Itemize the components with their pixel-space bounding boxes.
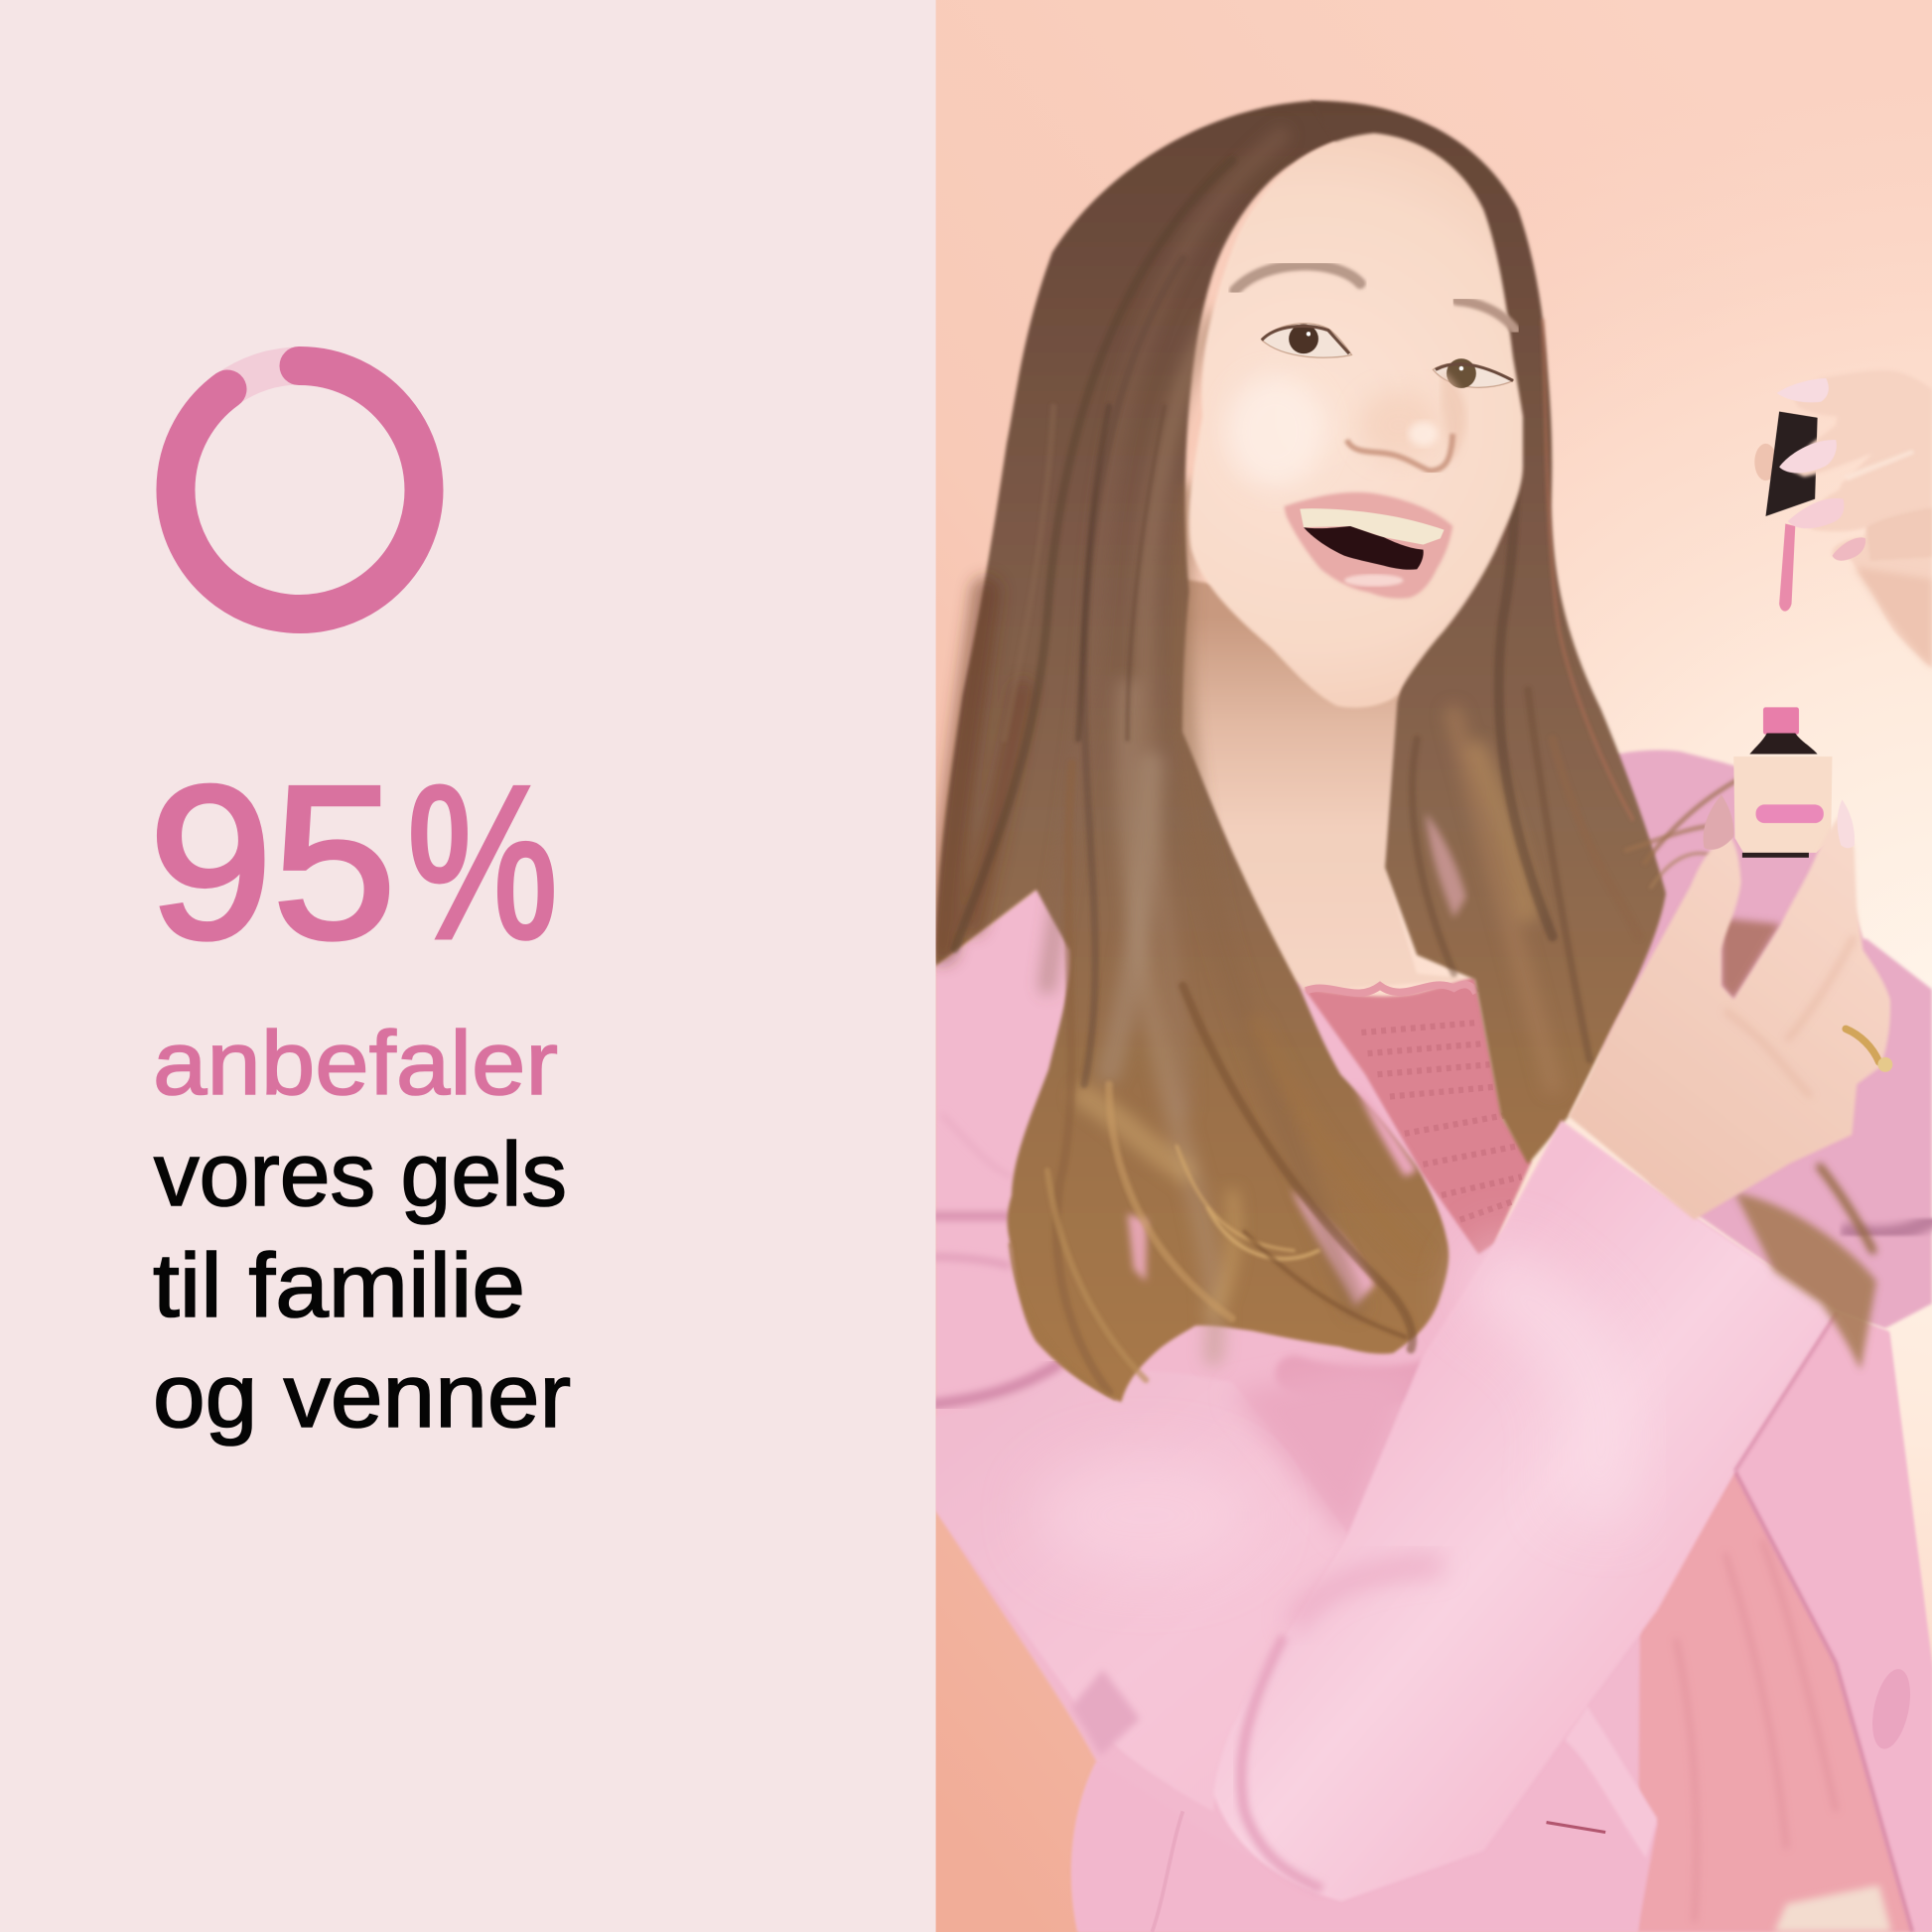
jacket: collar showing through hair: [1426, 813, 1466, 918]
donut value arc: [176, 365, 424, 614]
panel: photo of smiling woman holding nail gel bottle: [930, 0, 1932, 1932]
line: til familie: til familie: [153, 1236, 525, 1336]
jacket: far shoulder and raised sleeve: [1589, 750, 1932, 1328]
hair: front right section: [1310, 101, 1666, 1165]
blouse: smocked top: [1304, 977, 1532, 1254]
line: og venner: og venner: [153, 1346, 571, 1447]
left brow: [1235, 265, 1360, 291]
jacket: lower front panel with pocket: [1072, 1670, 1657, 1932]
bottle body: [1733, 757, 1832, 853]
lower lip highlight: [1344, 574, 1404, 587]
jacket: sleeve creases: [935, 1209, 1420, 1395]
brush cap: [1765, 412, 1818, 516]
blouse: lower fabric: [1637, 1471, 1912, 1932]
hair: fine strands: [955, 160, 1756, 1399]
knuckle shading: [1725, 936, 1855, 1097]
brush tip with gel: [1779, 523, 1795, 612]
gold ring: [1846, 1029, 1892, 1072]
shadow between fingers of lower hand: [1722, 918, 1780, 1001]
hand: lower hand holding bottle: [1569, 794, 1892, 1220]
right brow: [1456, 301, 1516, 331]
cheek highlight: [1226, 376, 1324, 486]
face: [1189, 133, 1523, 708]
teeth: [1300, 508, 1445, 545]
fingers and palm: [1787, 370, 1932, 668]
bottle neck: [1763, 707, 1799, 735]
thumb behind cap: [1754, 444, 1777, 481]
text block: recommendation statement: [153, 1014, 571, 1447]
bottle collar: [1749, 733, 1818, 755]
highlighted word: anbefaler: [153, 1014, 558, 1114]
line: vores gels: vores gels: [154, 1125, 567, 1225]
panel: left background: [0, 0, 936, 1932]
hand: upper hand holding brush: [1754, 370, 1932, 668]
product: gel polish bottle: [1733, 707, 1832, 858]
hair: broad soft tone bands: [942, 136, 1553, 1355]
jacket: lapel peeking through hair tips: [1128, 1084, 1417, 1307]
face shape: [1189, 133, 1523, 708]
jacket: right front panel with button: [1734, 1312, 1932, 1932]
photo background: [935, 0, 1932, 1932]
mouth opening: [1304, 526, 1424, 570]
neck and chest skin: [1182, 579, 1475, 991]
nose: [1346, 369, 1466, 471]
jacket: left upper sleeve: [930, 1365, 1417, 1811]
left eye: [1262, 324, 1351, 357]
right eye: [1433, 358, 1513, 388]
bottle label: [1756, 804, 1824, 823]
jacket: foreground forearm sleeve: [1213, 1120, 1837, 1901]
bottle base: [1742, 853, 1809, 858]
thumb nail: [1704, 794, 1733, 850]
hair: strand past the raised arm: [1734, 1167, 1876, 1370]
lips: [1284, 492, 1452, 599]
mouth: [1284, 492, 1452, 599]
buttonhole: [1547, 1823, 1605, 1832]
donut chart: 95 percent: [176, 365, 424, 614]
pocket flap: [1565, 1706, 1657, 1859]
big number: 95%: 95: [149, 742, 396, 984]
hair: front left long section: [935, 101, 1449, 1402]
donut track: [227, 365, 301, 389]
jacket button: [1872, 1669, 1910, 1749]
big number: 95%: %: [407, 742, 558, 984]
index fingernail: [1838, 799, 1855, 848]
jacket: body: [935, 890, 1932, 1932]
fingernails: [1777, 378, 1829, 402]
